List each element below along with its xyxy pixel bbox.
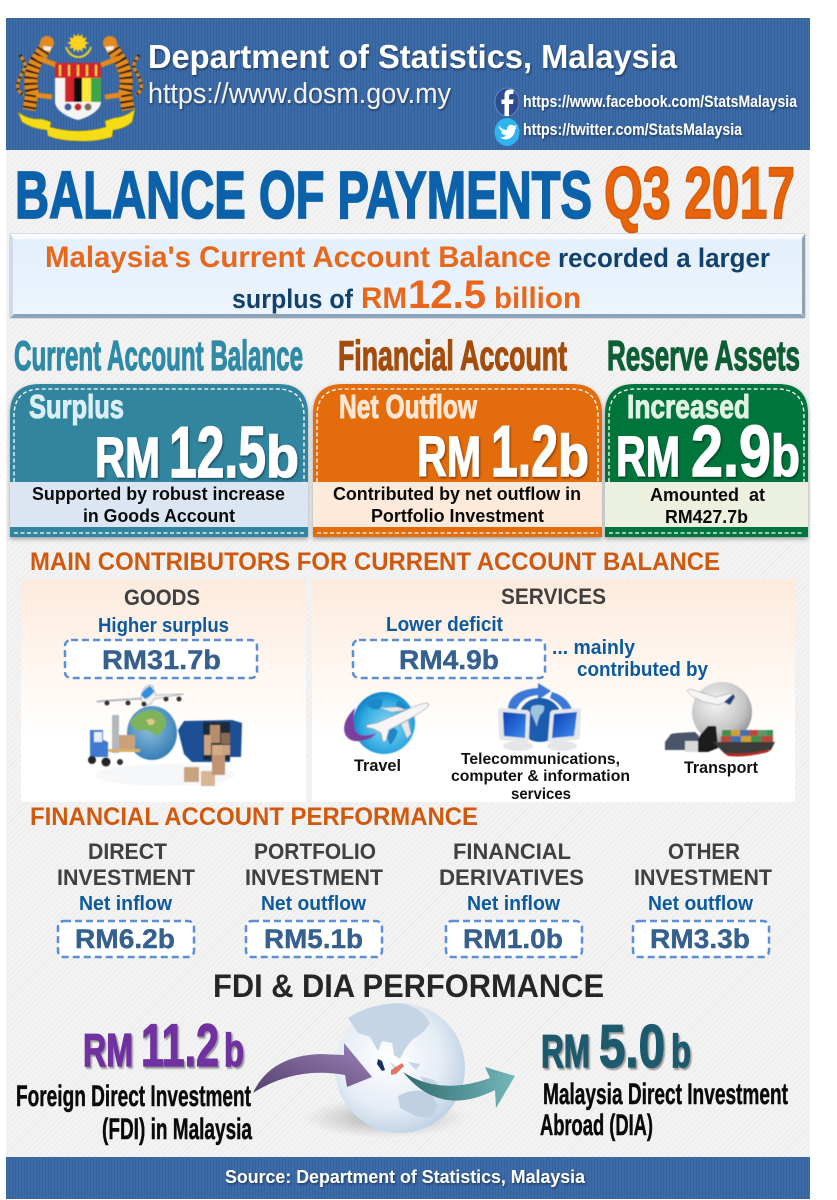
panel: services bbox=[312, 579, 795, 803]
headline callout box: Malaysia's Current Account Balance bbox=[45, 241, 551, 274]
icon: telecommunications computers bbox=[498, 683, 581, 751]
panel: current account card: RM bbox=[95, 426, 160, 490]
column: other investment: OTHER bbox=[668, 839, 740, 864]
column: direct investment: INVESTMENT bbox=[57, 865, 196, 890]
icon: cargo, plane, globe and truck bbox=[88, 685, 242, 786]
icon: facebook bbox=[495, 88, 519, 116]
main title: BALANCE OF PAYMENTS bbox=[15, 158, 592, 233]
DIA label: Abroad (DIA) bbox=[540, 1109, 653, 1142]
heading: main contributors: MAIN CONTRIBUTORS FOR CURRENT ACCOUNT BALANCE bbox=[30, 548, 720, 576]
panel: current account card: 12.5 bbox=[169, 413, 266, 493]
panel: financial account card: Contributed by net outflow in bbox=[333, 484, 581, 504]
column: financial derivatives: RM1.0b bbox=[463, 924, 563, 954]
footer source band: Source: Department of Statistics, Malaysia bbox=[225, 1167, 586, 1187]
FDI label: (FDI) in Malaysia bbox=[102, 1113, 252, 1146]
panel: reserve assets card: 2.9 bbox=[691, 412, 771, 492]
label: telecommunications: services bbox=[511, 786, 571, 803]
panel: reserve assets card: RM427.7b bbox=[665, 507, 748, 527]
panel: services: contributed by bbox=[577, 659, 709, 681]
column: other investment: Net outflow bbox=[648, 893, 753, 915]
headline callout box bbox=[10, 234, 805, 318]
DIA label bbox=[540, 1078, 788, 1142]
heading: FDI and DIA performance: FDI & DIA PERFORMANCE bbox=[213, 968, 604, 1004]
FDI figure: b bbox=[224, 1024, 244, 1076]
FDI label: Foreign Direct Investment bbox=[16, 1080, 251, 1113]
panel: current account card: b bbox=[266, 425, 299, 490]
icon: twitter bbox=[494, 118, 520, 146]
column: direct investment bbox=[57, 839, 196, 957]
section headings: three accounts: Current Account Balance bbox=[14, 332, 303, 379]
header band bbox=[6, 18, 810, 150]
FDI figure: 11.2 bbox=[141, 1012, 219, 1079]
panel: financial account card: RM bbox=[417, 425, 481, 489]
FDI figure bbox=[83, 1012, 244, 1079]
panel: current account card: Supported by robust increase bbox=[32, 484, 285, 504]
panel: financial account card: Net Outflow bbox=[339, 388, 477, 425]
panel: services: RM4.9b bbox=[399, 645, 499, 675]
label: telecommunications bbox=[451, 751, 630, 803]
column: portfolio investment: RM5.1b bbox=[264, 924, 363, 954]
arrow: DIA outflow bbox=[403, 1067, 515, 1108]
panel: reserve assets card: RM bbox=[616, 425, 680, 489]
panel: reserve assets card: b bbox=[771, 424, 800, 489]
headline callout box: recorded a larger bbox=[558, 243, 770, 273]
panel: goods: Higher surplus bbox=[98, 615, 229, 637]
icon: Malaysian coat of arms bbox=[18, 33, 141, 141]
panel: reserve assets card bbox=[605, 384, 808, 537]
column: portfolio investment: Net outflow bbox=[261, 893, 366, 915]
panel: services: Lower deficit bbox=[386, 614, 503, 636]
panel: reserve assets card: Amounted at bbox=[650, 485, 765, 505]
column: other investment: INVESTMENT bbox=[634, 865, 773, 890]
arrow: FDI inflow bbox=[253, 1043, 372, 1093]
section headings: three accounts bbox=[14, 332, 800, 379]
panel: services: SERVICES bbox=[501, 584, 606, 609]
column: portfolio investment: PORTFOLIO bbox=[254, 839, 376, 864]
headline callout box: RM bbox=[361, 282, 407, 315]
label: telecommunications: Telecommunications, bbox=[461, 751, 620, 768]
panel: financial account card: 1.2 bbox=[491, 412, 558, 492]
facebook link: https://www.facebook.com/StatsMalaysia bbox=[523, 93, 798, 111]
footer source band bbox=[6, 1157, 810, 1199]
icon: globe with Malaysia highlighted bbox=[303, 1003, 467, 1138]
column: direct investment: RM6.2b bbox=[75, 924, 175, 954]
DIA figure: b bbox=[671, 1025, 691, 1077]
panel: current account card: in Goods Account bbox=[83, 506, 235, 526]
panel: current account card bbox=[10, 384, 308, 537]
headline callout box: surplus of bbox=[232, 284, 354, 314]
panel: services: ... mainly bbox=[552, 637, 636, 659]
panel: goods: RM31.7b bbox=[102, 645, 221, 675]
column: direct investment: Net inflow bbox=[79, 893, 172, 915]
label: transport: Transport bbox=[684, 758, 758, 777]
panel: reserve assets card: Increased bbox=[627, 388, 750, 425]
header title: Department of Statistics, Malaysia bbox=[148, 38, 678, 75]
heading: financial account performance: FINANCIAL ACCOUNT PERFORMANCE bbox=[30, 803, 478, 831]
column: portfolio investment bbox=[245, 839, 384, 957]
FDI figure: RM bbox=[83, 1024, 133, 1076]
column: other investment bbox=[633, 839, 773, 957]
FDI label bbox=[16, 1080, 252, 1146]
twitter link: https://twitter.com/StatsMalaysia bbox=[523, 121, 743, 139]
label: telecommunications: computer & information bbox=[451, 768, 630, 785]
section headings: three accounts: Financial Account bbox=[338, 332, 567, 379]
column: direct investment: DIRECT bbox=[88, 839, 168, 864]
column: financial derivatives: Net inflow bbox=[467, 893, 560, 915]
headline callout box: 12.5 bbox=[408, 273, 486, 317]
column: financial derivatives bbox=[439, 839, 584, 957]
panel: current account card: Surplus bbox=[29, 388, 124, 425]
column: other investment: RM3.3b bbox=[650, 924, 750, 954]
website url: https://www.dosm.gov.my bbox=[148, 78, 451, 110]
panel: financial account card: b bbox=[558, 424, 589, 489]
panel: goods bbox=[21, 579, 306, 802]
column: financial derivatives: FINANCIAL bbox=[453, 839, 571, 864]
icon: transport globe, vehicles and ship bbox=[665, 682, 775, 756]
label: travel: Travel bbox=[354, 756, 401, 775]
DIA figure: RM bbox=[541, 1025, 590, 1077]
panel: goods: GOODS bbox=[124, 585, 200, 610]
DIA figure: 5.0 bbox=[599, 1013, 665, 1080]
column: financial derivatives: DERIVATIVES bbox=[439, 865, 584, 890]
DIA figure bbox=[541, 1013, 691, 1080]
headline callout box: billion bbox=[494, 282, 581, 315]
panel: financial account card bbox=[313, 384, 602, 537]
icon: travel globe and plane bbox=[344, 692, 429, 754]
panel: financial account card: Portfolio Investment bbox=[371, 506, 544, 526]
column: portfolio investment: INVESTMENT bbox=[245, 865, 384, 890]
